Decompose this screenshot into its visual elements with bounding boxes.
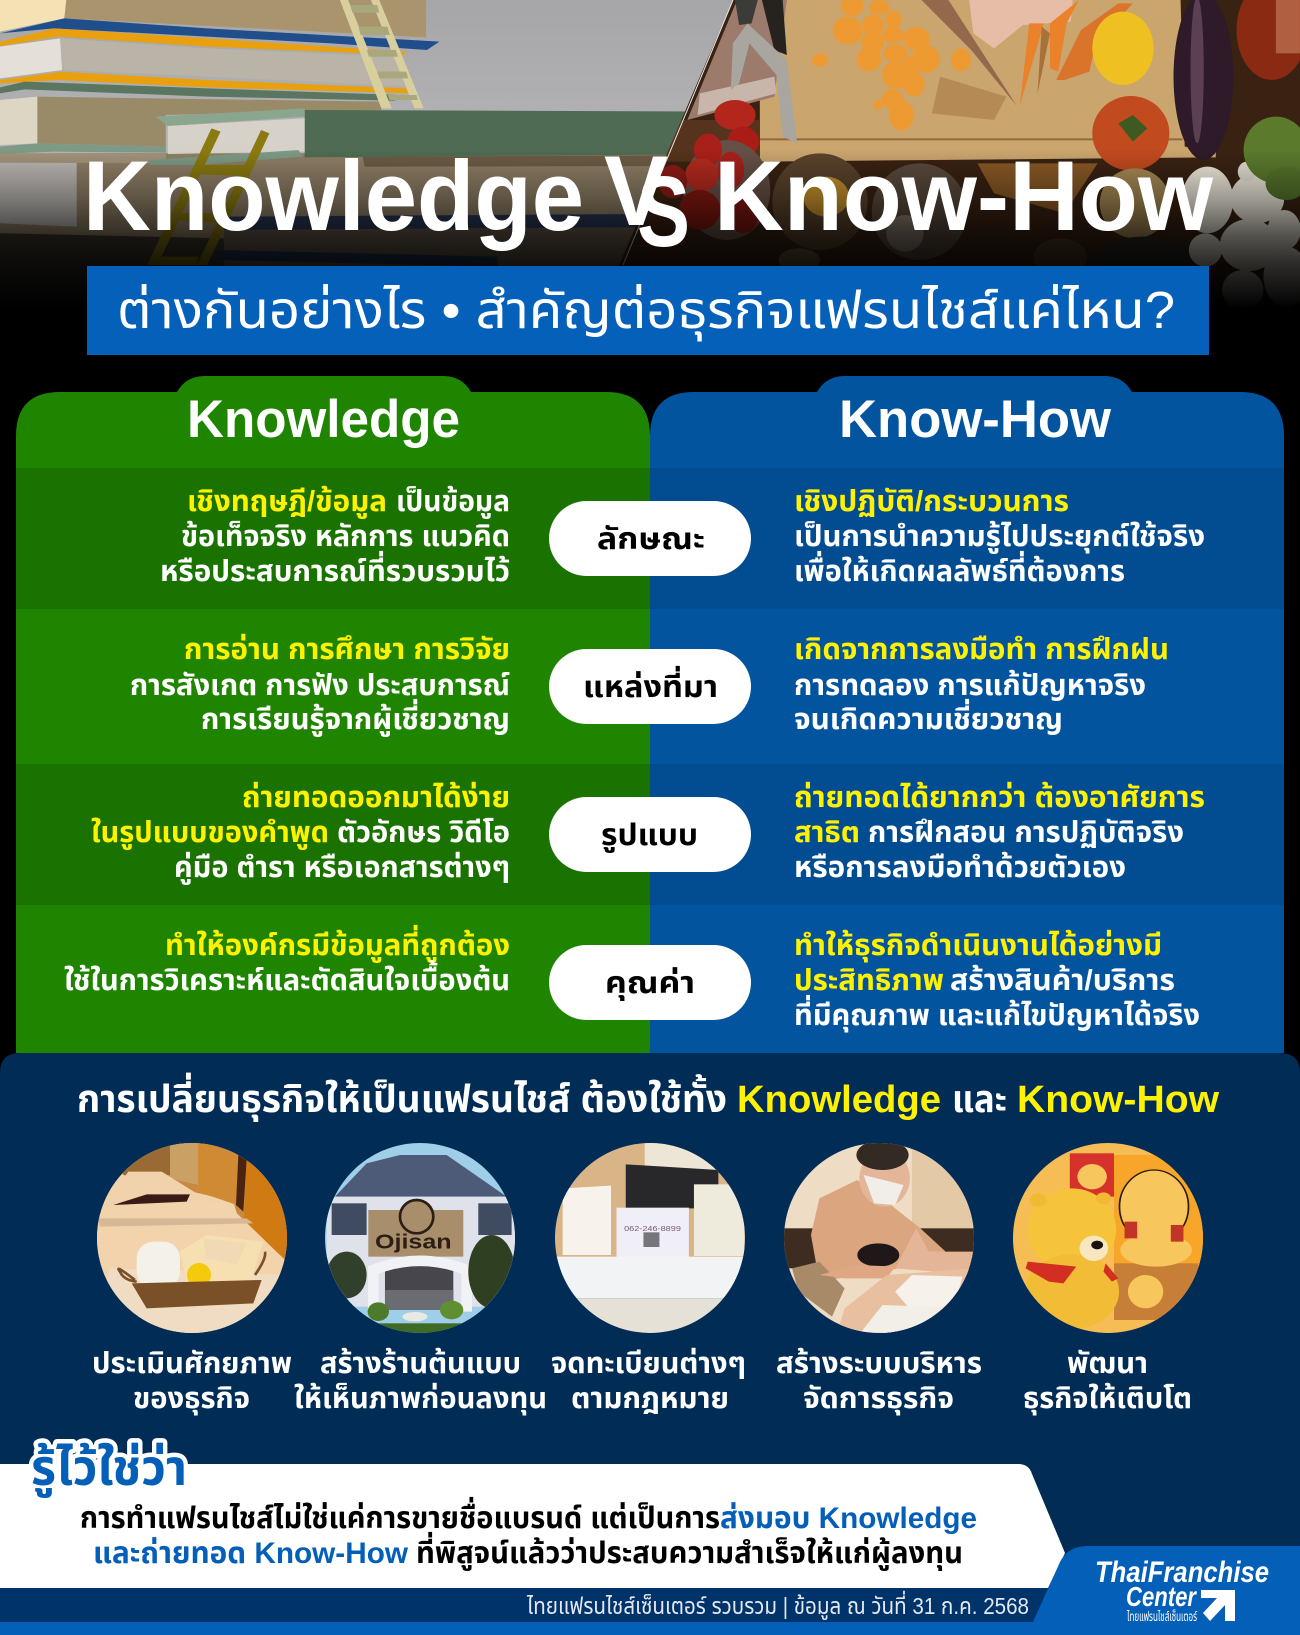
knowledge row 1 text: เป็นข้อมูล [396, 486, 510, 519]
step 1 label [92, 1348, 292, 1415]
logo: ThaiFranchise Center: ไทยแฟรนไชส์เซ็นเตอร์ [1126, 1609, 1197, 1624]
know-how row 1 text [794, 486, 1205, 588]
title word: Know-How: Know-How [714, 140, 1214, 251]
know-how row 3 text: การฝึกสอน การปฏิบัติจริง [868, 817, 1184, 849]
panel: franchise steps [0, 1053, 1300, 1635]
know-how row 3 text: หรือการลงมือทำด้วยตัวเอง [794, 852, 1126, 884]
step 5 label: ธุรกิจให้เติบโต [1023, 1383, 1192, 1415]
step 3 label: จดทะเบียนต่างๆ [551, 1348, 746, 1380]
step 1 label: ของธุรกิจ [133, 1383, 250, 1415]
know-how row 1 text: เชิงปฏิบัติ/กระบวนการ [794, 486, 1069, 518]
step 3 photo: front desk with documents: 062-246-8899 [624, 1224, 681, 1233]
step 3 label: ตามกฎหมาย [571, 1383, 729, 1415]
footer strip with source line [0, 1588, 1050, 1622]
knowledge row 3 text: คู่มือ ตำรา หรือเอกสารต่างๆ [174, 852, 510, 885]
knowledge row 3 text: ถ่ายทอดออกมาได้ง่าย [242, 782, 510, 814]
subtitle banner: ต่างกันอย่างไร • สำคัญต่อธุรกิจแฟรนไชส์แค่ไหน? [117, 282, 1175, 342]
know-how row 4 text: ประสิทธิภาพ [794, 965, 944, 997]
heading: franchise needs both: Know-How [1017, 1079, 1219, 1121]
know-how row 2 text [794, 634, 1169, 736]
step 4 photo: massage therapist [784, 1143, 974, 1333]
step 5 photo: bear mascot [1013, 1143, 1203, 1333]
pill: แหล่งที่มา [549, 649, 751, 724]
step 4 label: สร้างระบบบริหาร [776, 1348, 982, 1380]
know-how row 4 text: ทำให้ธุรกิจดำเนินงานได้อย่างมี [794, 930, 1162, 962]
know-how row 3 text: ถ่ายทอดได้ยากกว่า ต้องอาศัยการ [794, 782, 1205, 814]
heading: Knowledge: Knowledge [187, 390, 460, 449]
knowledge row 2 text: การอ่าน การศึกษา การวิจัย [184, 634, 510, 666]
title word: Knowledge: Knowledge [83, 140, 584, 251]
know-how row 1 text: เพื่อให้เกิดผลลัพธ์ที่ต้องการ [794, 550, 1125, 588]
heading: franchise needs both [77, 1072, 1219, 1122]
step 2 label: ให้เห็นภาพก่อนลงทุน [294, 1383, 547, 1415]
step 2 label: สร้างร้านต้นแบบ [320, 1348, 521, 1380]
know-how row 2 text: การทดลอง การแก้ปัญหาจริง [794, 670, 1146, 702]
callout text [80, 1496, 977, 1571]
know-how row 1 text: เป็นการนำความรู้ไปประยุกต์ใช้จริง [794, 521, 1205, 554]
step 1 label: ประเมินศักยภาพ [92, 1348, 292, 1380]
photo: cutting board and vegetables [619, 0, 1300, 300]
logo: ThaiFranchise Center: ThaiFranchise [1095, 1556, 1269, 1589]
step 3 label [551, 1348, 746, 1415]
knowledge row 2 text [130, 634, 510, 737]
title: Knowledge VS Know-How [83, 135, 1214, 268]
knowledge row 3 text [91, 782, 510, 885]
know-how row 4 text: สร้างสินค้า/บริการ [950, 965, 1175, 997]
photo: stacked books with ladders [0, 0, 732, 276]
step 4 label: จัดการธุรกิจ [803, 1383, 954, 1415]
knowledge row 4 text: ใช้ในการวิเคราะห์และตัดสินใจเบื้องต้น [64, 959, 510, 997]
callout heading: รู้ไว้ใช่ว่า [31, 1440, 187, 1498]
callout text: การทำแฟรนไชส์ไม่ใช่แค่การขายชื่อแบรนด์ แต่เป็นการ [80, 1496, 720, 1535]
pill: คุณค่า: คุณค่า [605, 967, 695, 1001]
pill: รูปแบบ: รูปแบบ [601, 819, 698, 853]
knowledge row 1 text [160, 486, 510, 588]
pill: คุณค่า [549, 945, 751, 1020]
icon: arrow [1201, 1590, 1235, 1621]
step 2 label [294, 1348, 547, 1415]
hero photo: books and cooking [0, 0, 1300, 300]
step 2 photo: Ojisan storefront: Ojisan [375, 1231, 452, 1253]
step 3 photo: front desk with documents [555, 1143, 745, 1333]
heading: franchise needs both: Knowledge [737, 1079, 941, 1121]
know-how row 4 text: ที่มีคุณภาพ และแก้ไขปัญหาได้จริง [794, 994, 1200, 1032]
knowledge row 1 text: ข้อเท็จจริง หลักการ แนวคิด [181, 521, 510, 553]
heading: Know-How: Know-How [839, 390, 1112, 449]
pill: แหล่งที่มา: แหล่งที่มา [583, 665, 718, 704]
footer strip with source line: ไทยแฟรนไชส์เซ็นเตอร์ รวบรวม | ข้อมูล ณ วันที่ 31 ก.ค. 2568 [526, 1590, 1029, 1621]
knowledge row 2 text: การสังเกต การฟัง ประสบการณ์ [130, 670, 510, 702]
knowledge row 1 text: เชิงทฤษฎี/ข้อมูล [187, 486, 387, 519]
step 2 photo: Ojisan storefront [325, 1143, 515, 1333]
know-how row 3 text: สาธิต [794, 817, 860, 849]
heading: franchise needs both: การเปลี่ยนธุรกิจให้เป็นแฟรนไชส์ ต้องใช้ทั้ง [77, 1072, 727, 1122]
knowledge row 2 text: การเรียนรู้จากผู้เชี่ยวชาญ [201, 698, 510, 737]
callout text: และถ่ายทอด Know-How [93, 1537, 409, 1570]
knowledge row 1 text: หรือประสบการณ์ที่รวบรวมไว้ [160, 550, 510, 588]
pill: รูปแบบ [549, 797, 751, 872]
panel: Know-How column [650, 376, 1284, 1053]
knowledge row 3 text: ตัวอักษร วิดีโอ [337, 817, 510, 849]
heading: franchise needs both: และ [952, 1079, 1007, 1121]
step 5 label [1023, 1348, 1192, 1415]
title: VS mark: V [604, 135, 668, 246]
panel: Knowledge column [16, 376, 650, 1053]
title: VS mark: S [637, 156, 690, 268]
subtitle banner [87, 266, 1209, 355]
pill: ลักษณะ [549, 501, 751, 576]
step 1 photo: spa bed with basket [97, 1143, 287, 1333]
step 5 label: พัฒนา [1067, 1348, 1148, 1380]
knowledge row 4 text: ทำให้องค์กรมีข้อมูลที่ถูกต้อง [165, 924, 510, 963]
logo: ThaiFranchise Center: Center [1126, 1581, 1198, 1612]
callout text: ที่พิสูจน์แล้วว่าประสบความสำเร็จให้แก่ผู้ลงทุน [416, 1531, 963, 1571]
know-how row 2 text: เกิดจากการลงมือทำ การฝึกฝน [794, 634, 1169, 666]
logo: ThaiFranchise Center [0, 1546, 1300, 1635]
title: VS mark [604, 135, 690, 268]
know-how row 4 text [794, 930, 1200, 1032]
callout: good to know [0, 1440, 1065, 1588]
knowledge row 3 text: ในรูปแบบของคำพูด [91, 817, 329, 850]
know-how row 3 text [794, 782, 1205, 884]
callout text: ส่งมอบ Knowledge [720, 1502, 977, 1535]
pill: ลักษณะ: ลักษณะ [597, 523, 705, 556]
know-how row 2 text: จนเกิดความเชี่ยวชาญ [794, 698, 1063, 736]
knowledge row 4 text [64, 924, 510, 997]
step 4 label [776, 1348, 982, 1415]
